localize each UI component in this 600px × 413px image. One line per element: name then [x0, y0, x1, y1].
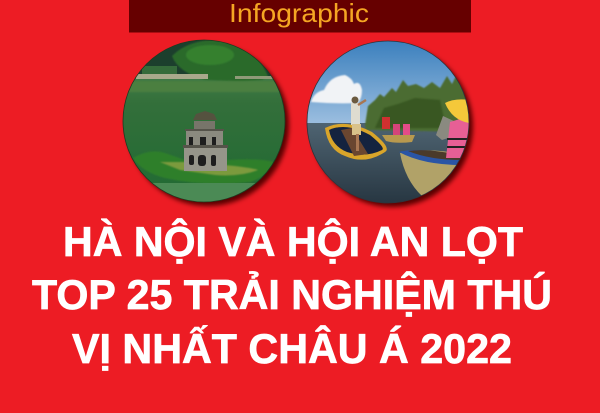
photo: Hoan Kiem lake and Turtle Tower: [120, 38, 290, 206]
basket boat left: [325, 124, 387, 160]
basket boat right: [399, 150, 460, 196]
tourists boat: [382, 117, 415, 143]
title line 1: HÀ NỘI VÀ HỘI AN LỌT: [63, 217, 523, 265]
tourist in pink life vest: [436, 99, 470, 158]
photo: Hoi An coconut forest basket boats: [300, 40, 480, 208]
title line 2: TOP 25 TRẢI NGHIỆM THÚ: [32, 270, 552, 318]
title line 3: VỊ NHẤT CHÂU Á 2022: [72, 324, 512, 372]
boatman: [351, 96, 366, 151]
top banner: [129, 0, 471, 32]
icon: Turtle Tower: [183, 111, 228, 171]
title: [32, 217, 552, 372]
